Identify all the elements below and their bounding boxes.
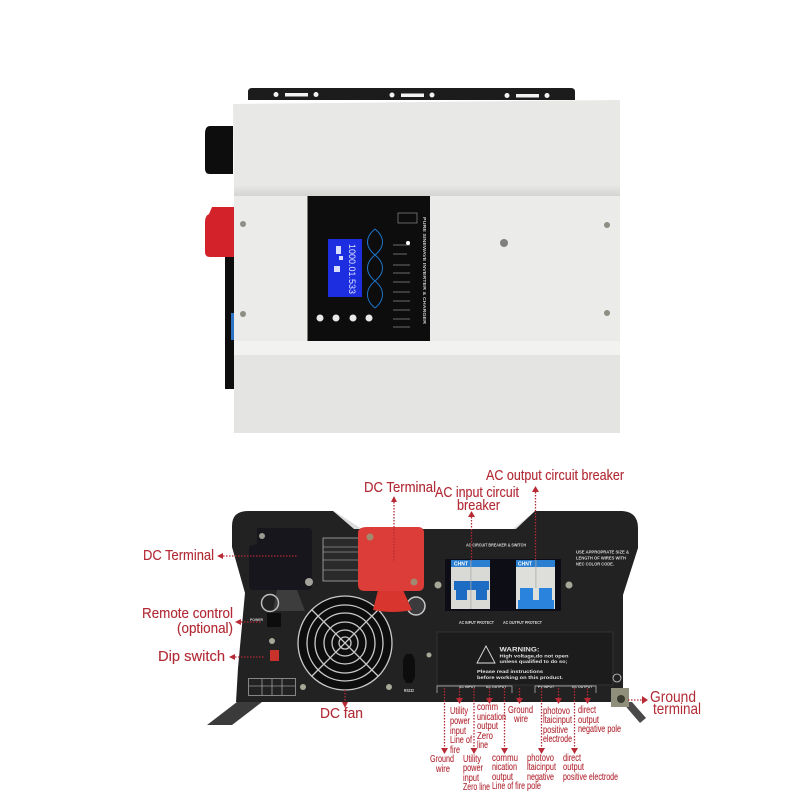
left mounting foot xyxy=(207,702,262,725)
rear chassis xyxy=(232,511,638,702)
label: DC fan xyxy=(320,690,363,722)
label: utility input line of fire: fire xyxy=(450,745,460,756)
positive post xyxy=(407,597,425,615)
control panel xyxy=(308,196,430,341)
label: direct output positive xyxy=(563,753,618,783)
breaker window xyxy=(445,559,561,611)
label: utility input line of fire: Line of xyxy=(450,735,472,746)
AC output breaker: CHNT xyxy=(518,562,532,568)
label: photovoltaic input positive: electrode xyxy=(543,734,572,745)
ground block xyxy=(611,688,629,707)
terminal strip: PV INPUT xyxy=(538,685,555,689)
warning text: WARNING: xyxy=(500,646,540,654)
label: utility input zero line xyxy=(463,754,490,793)
label: ground wire lower xyxy=(430,754,454,775)
breaker protect captions: AC OUTPUT PROTECT xyxy=(503,620,542,625)
label: utility input line of fire: input xyxy=(450,726,466,737)
label: left DC terminal: DC Terminal xyxy=(143,548,214,564)
label: photovoltaic input positive: photovo xyxy=(543,706,570,717)
label: AC input breaker xyxy=(435,485,519,562)
label: photovoltaic input negative: pole xyxy=(527,781,541,792)
label: direct output negative: direct xyxy=(578,705,596,716)
label: top DC terminal: DC Terminal xyxy=(364,480,436,496)
label: utility input zero line: Utility xyxy=(463,754,481,765)
AC input breaker: CHNT xyxy=(454,562,468,568)
blue side tab xyxy=(231,313,235,340)
label: ground wire upper xyxy=(508,705,533,725)
warning triangle xyxy=(477,646,495,663)
status indicators xyxy=(393,213,417,327)
wire size note: LENGTH OF WIRES WITH xyxy=(576,556,626,560)
LCD readout: 1000.01.533 xyxy=(347,244,357,294)
label: photovoltaic input positive: ltaicinput xyxy=(543,715,572,726)
dip switch xyxy=(270,650,279,661)
label: remote control: (optional) xyxy=(177,621,233,637)
label: direct output positive: output xyxy=(563,762,584,773)
label: communication output zero line: line xyxy=(477,740,488,751)
label: utility input zero line: Zero line xyxy=(463,782,490,793)
label: AC input breaker: breaker xyxy=(457,498,500,514)
remote port: POWER xyxy=(250,618,263,622)
black side edge xyxy=(225,257,234,389)
label: ground wire upper: wire xyxy=(513,714,528,725)
breaker section title: AC CIRCUIT BREAKER & SWITCH xyxy=(466,542,526,548)
label: AC output breaker xyxy=(486,468,624,560)
black DC terminal cover xyxy=(205,126,233,174)
label: photovoltaic input positive: positive xyxy=(543,725,568,736)
panel buttons xyxy=(316,314,372,322)
AC output breaker xyxy=(516,560,555,609)
label: AC input breaker: AC input circuit xyxy=(435,485,519,501)
mounting bracket xyxy=(248,88,575,100)
label: communication output line of fire: Line of fire xyxy=(492,781,525,792)
label: utility input line of fire: power xyxy=(450,716,471,727)
AC input breaker xyxy=(451,560,490,609)
label: communication output zero line: Zero xyxy=(477,731,493,742)
label: top DC terminal xyxy=(364,480,436,562)
bottom view: inverter rear xyxy=(207,511,646,725)
label: photovoltaic input positive xyxy=(543,706,572,745)
label: communication output zero line xyxy=(477,702,506,751)
label: communication output line of fire: nication xyxy=(492,762,517,773)
terminal strip: AC INPUT xyxy=(459,685,476,689)
label: AC output breaker: AC output circuit breaker xyxy=(486,468,624,484)
RS232 port xyxy=(403,654,415,693)
label: direct output negative: output xyxy=(578,715,599,726)
label: utility input zero line: input xyxy=(463,773,479,784)
label: communication output zero line: unication xyxy=(477,712,506,723)
wire size note: NEC COLOR CODE. xyxy=(576,562,614,566)
warning text: unless qualified to do so; xyxy=(500,659,568,665)
terminal strip xyxy=(437,685,596,693)
label: direct output positive: positive electrode xyxy=(563,772,618,783)
label: communication output line of fire xyxy=(492,753,525,792)
chassis screws xyxy=(240,221,610,317)
breaker protect captions xyxy=(459,620,542,625)
power indicator xyxy=(406,241,410,245)
label: ground wire lower: wire xyxy=(435,764,450,775)
label: ground terminal: Ground xyxy=(650,689,696,706)
label: ground wire upper: Ground xyxy=(508,705,533,716)
label: photovoltaic input negative: photovo xyxy=(527,753,554,764)
label: ground terminal: terminal xyxy=(653,701,701,718)
label: photovoltaic input negative: negative xyxy=(527,772,554,783)
top view: inverter front xyxy=(205,88,620,433)
label: DC fan: DC fan xyxy=(320,706,363,722)
panel vertical title: PURE SINEWAVE INVERTER & CHARGER xyxy=(422,217,427,324)
breaker protect captions: AC INPUT PROTECT xyxy=(459,620,494,625)
label: direct output positive: direct xyxy=(563,753,581,764)
negative post xyxy=(262,594,278,612)
label: left DC terminal xyxy=(143,548,298,564)
warning text: before working on this product. xyxy=(477,675,563,681)
specification sticker xyxy=(323,538,361,581)
terminal strip: AC OUTPUT xyxy=(486,685,507,689)
white wedge behind top xyxy=(330,511,540,529)
label: ground terminal xyxy=(628,689,701,718)
terminal strip: DC OUTPUT xyxy=(572,685,593,689)
label: utility input zero line: power xyxy=(463,763,484,774)
label: utility input line of fire xyxy=(450,706,472,756)
white chassis xyxy=(233,100,620,433)
warning text: High voltage,do not open xyxy=(500,654,569,660)
label: dip switch: Dip switch xyxy=(158,649,225,665)
wire size note: USE APPROPRATE SIZE & xyxy=(576,550,630,554)
remote port xyxy=(250,613,281,627)
terminal cover xyxy=(437,632,613,685)
label: photovoltaic input negative xyxy=(527,753,556,792)
sine waves xyxy=(368,229,382,308)
label arrows: terminal strip xyxy=(441,688,591,754)
label: remote control xyxy=(142,606,262,637)
LCD screen xyxy=(328,239,362,297)
black DC terminal xyxy=(249,528,313,611)
fan guard xyxy=(298,596,392,690)
rear screws xyxy=(269,582,572,690)
rating stickers xyxy=(248,678,296,696)
label: communication output zero line: comm xyxy=(477,702,498,713)
right mounting foot xyxy=(622,702,646,723)
label: photovoltaic input negative: ltaicinput xyxy=(527,762,556,773)
label: communication output line of fire: commu xyxy=(492,753,518,764)
label: dip switch xyxy=(158,649,265,665)
label: remote control: Remote control xyxy=(142,606,233,622)
red DC terminal xyxy=(358,527,424,612)
red DC terminal cover xyxy=(205,207,234,257)
wire size note xyxy=(576,550,630,566)
label: direct output negative xyxy=(578,705,621,735)
label: ground wire lower: Ground xyxy=(430,754,454,765)
RS232 port: RS232 xyxy=(404,688,414,693)
label: communication output line of fire: output xyxy=(492,772,513,783)
label: utility input line of fire: Utility xyxy=(450,706,468,717)
label: direct output negative: negative pole xyxy=(578,724,621,735)
warning text: Please read instructions xyxy=(477,669,543,675)
label: communication output zero line: output xyxy=(477,721,498,732)
warning text xyxy=(477,646,569,681)
grounding symbol xyxy=(613,674,621,682)
